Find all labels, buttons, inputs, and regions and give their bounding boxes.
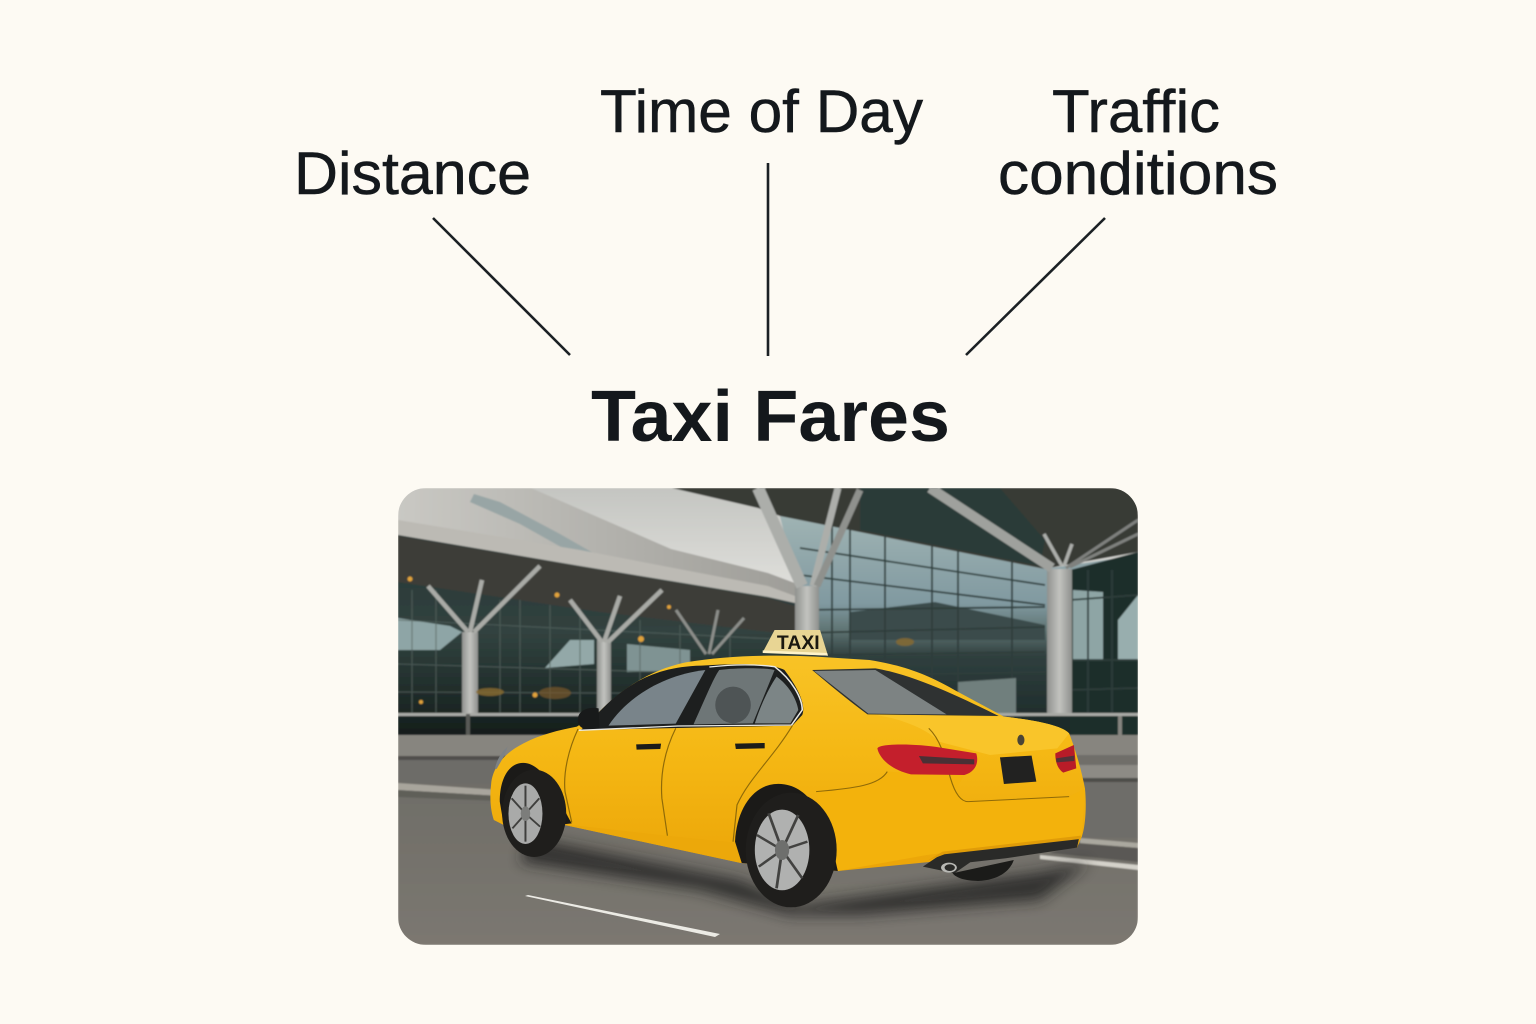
label: Traffic conditions: conditions	[998, 140, 1278, 207]
left columns	[428, 566, 744, 716]
photo: yellow taxi at airport terminal	[398, 488, 1138, 945]
ground	[398, 783, 1138, 945]
yellow taxi	[490, 630, 1086, 907]
lane marking	[525, 895, 720, 937]
tail lights	[877, 744, 1076, 775]
emblem	[1017, 735, 1024, 745]
large columns	[758, 488, 1138, 715]
railing	[398, 713, 1138, 716]
arrow line: Time of Day to Taxi Fares	[767, 163, 769, 356]
heading: Taxi Fares: Taxi Fares	[591, 377, 950, 457]
mirror	[578, 708, 599, 729]
front lamp	[495, 747, 508, 769]
body seams and handles	[565, 726, 1069, 842]
label: Traffic conditions: Traffic	[1052, 78, 1220, 145]
windows	[579, 664, 999, 730]
terminal building background	[398, 488, 1138, 945]
car shadow	[520, 838, 1090, 915]
arrow line: Distance to Taxi Fares	[433, 218, 570, 355]
license plate	[1000, 756, 1036, 784]
label: Distance: Distance	[294, 140, 531, 207]
arrow line: Traffic conditions to Taxi Fares	[966, 218, 1105, 355]
label: Time of Day: Time of Day	[600, 78, 923, 145]
right glass and canopy	[780, 516, 1138, 735]
roof sign: TAXI	[777, 633, 820, 654]
bumper and exhaust	[923, 836, 1081, 881]
roof sign	[763, 630, 828, 656]
label: Traffic conditions	[998, 78, 1278, 207]
car body	[490, 656, 1086, 871]
front wheel	[500, 763, 572, 857]
rear wheel	[735, 784, 838, 907]
